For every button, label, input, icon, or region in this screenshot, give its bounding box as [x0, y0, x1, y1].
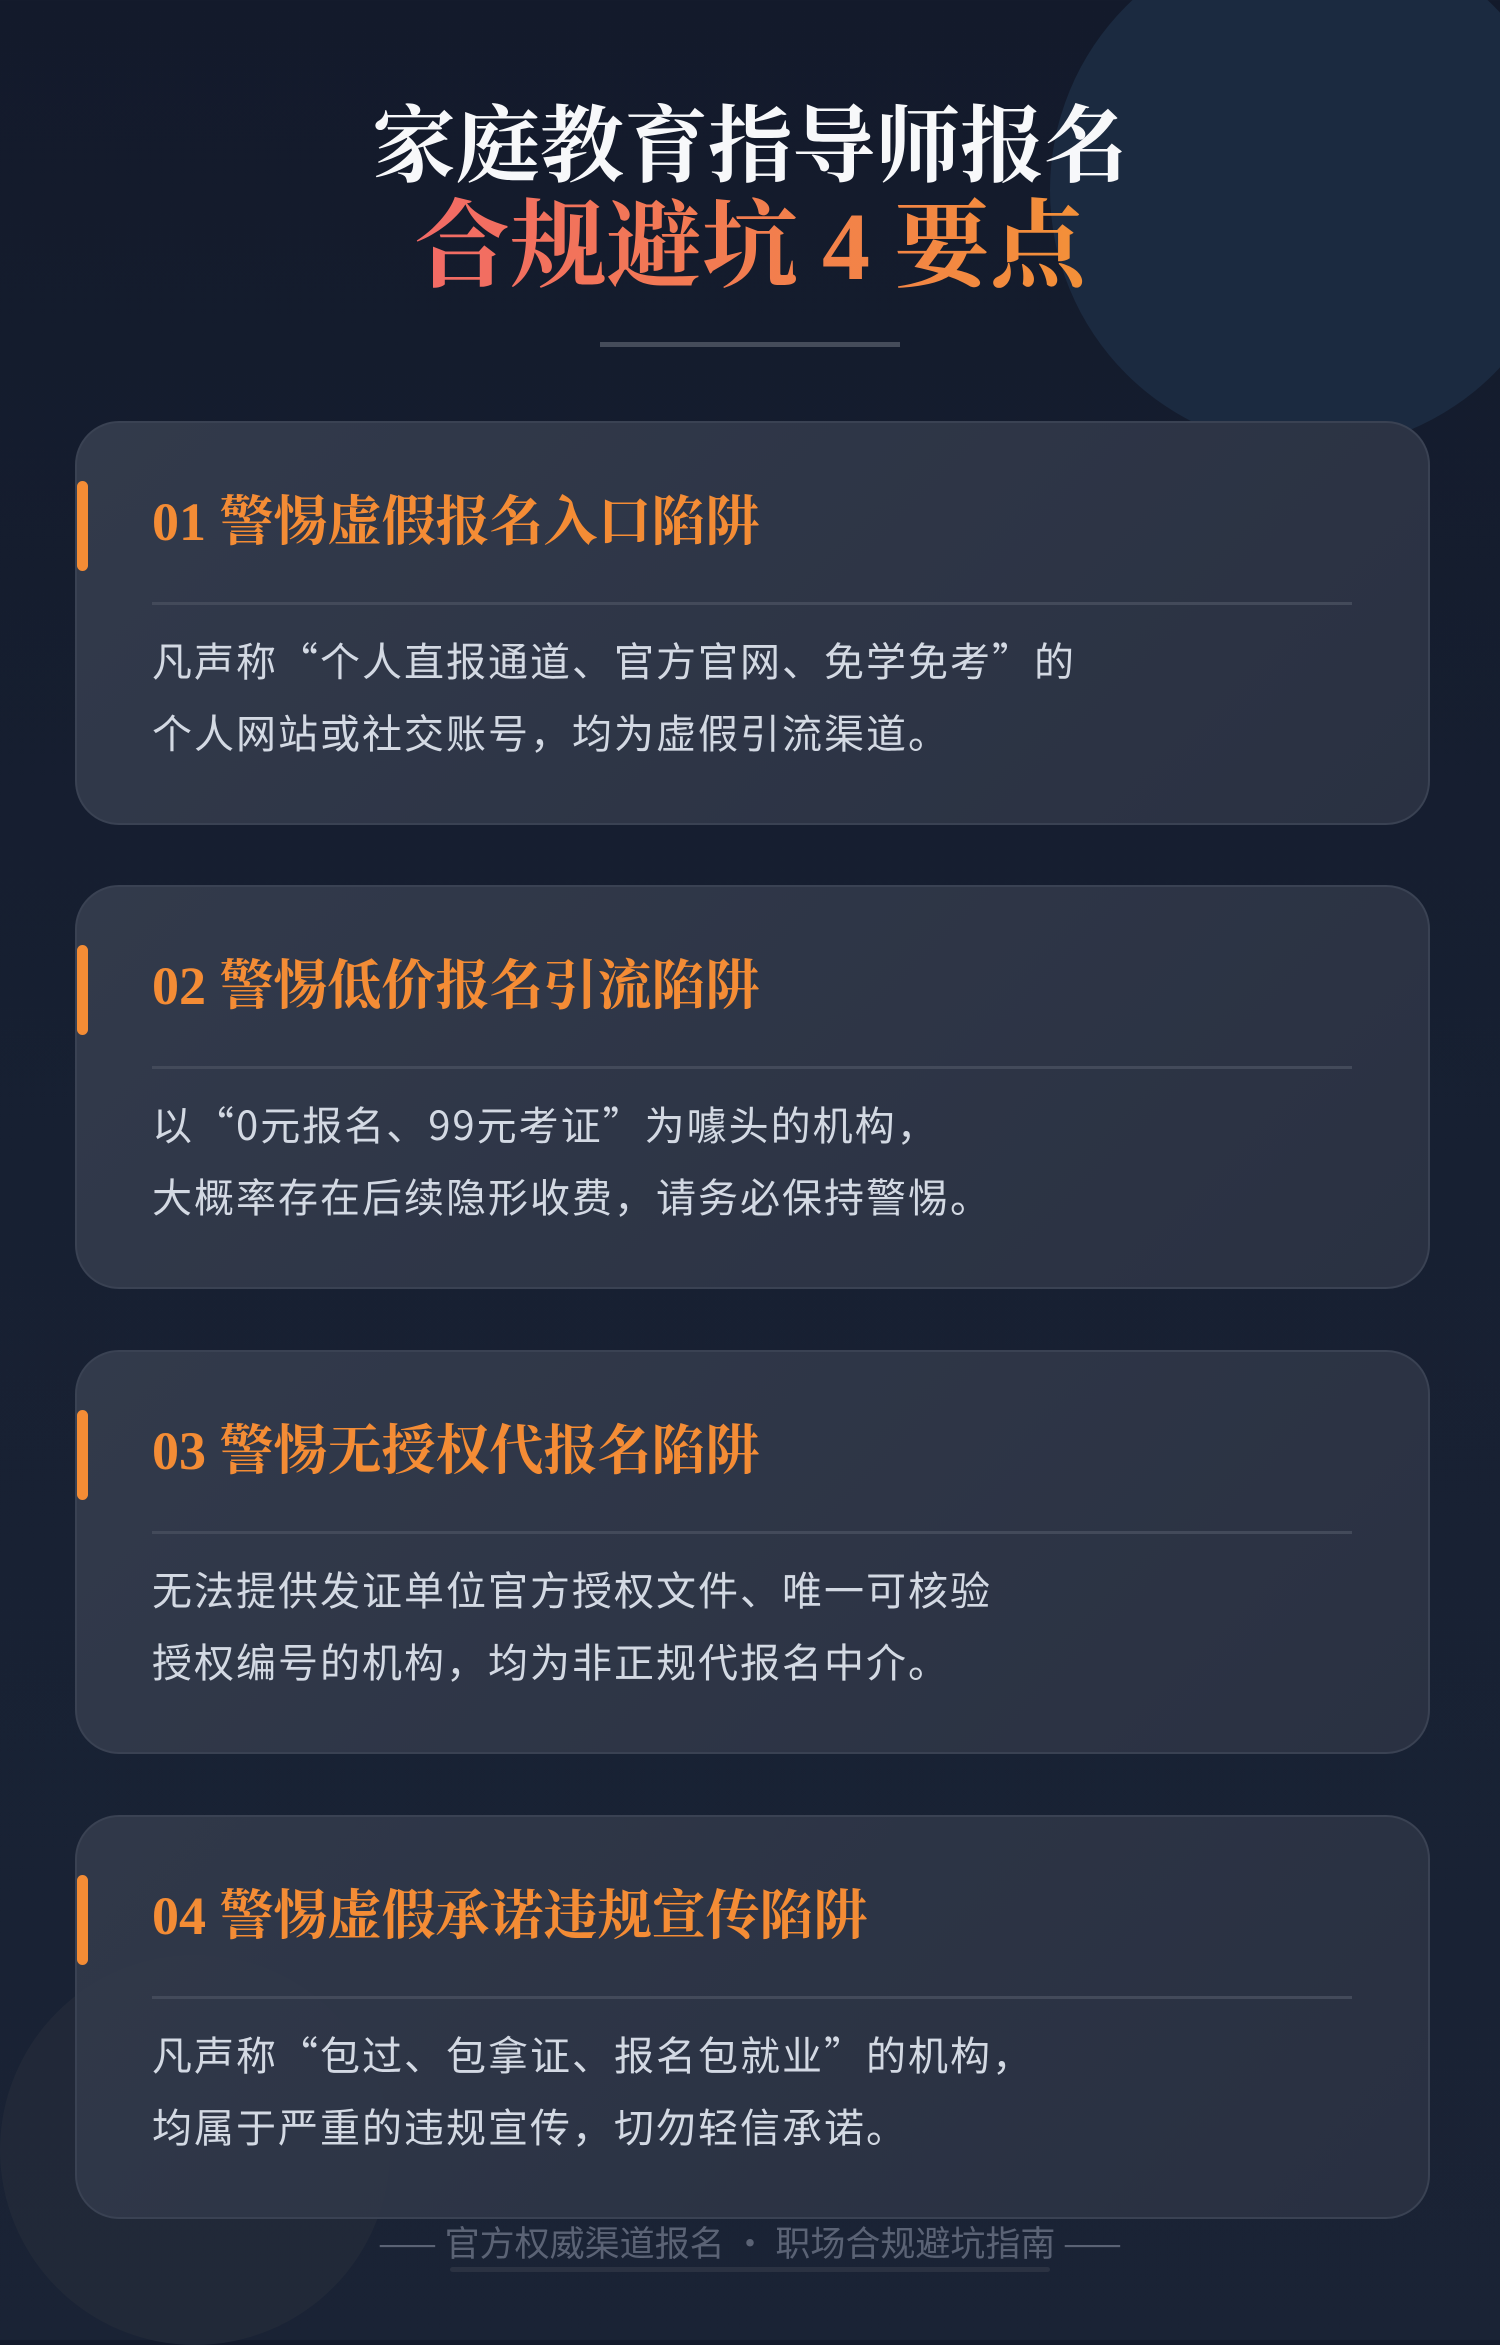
body 03: 无法提供发证单位官方授权文件、唯一可核验: [152, 1559, 992, 1617]
body 01: 个人网站或社交账号，均为虚假引流渠道。: [152, 702, 950, 760]
heading 01: 01 警惕虚假报名入口陷阱: [152, 492, 760, 552]
heading 02: 02 警惕低价报名引流陷阱: [152, 956, 760, 1016]
title line 1: 家庭教育指导师报名: [372, 101, 1128, 194]
body 02: [152, 1094, 992, 1224]
body 02: 大概率存在后续隐形收费，请务必保持警惕。: [152, 1166, 992, 1224]
footer bar: [450, 2267, 1050, 2272]
title line 2: 合规避坑 4 要点: [414, 193, 1086, 300]
panel: card 02: [75, 885, 1430, 1289]
panel: card 01: [75, 421, 1430, 825]
panel: card 04: [75, 1815, 1430, 2219]
footer text: —— 官方权威渠道报名 · 职场合规避坑指南 ——: [378, 2216, 1122, 2267]
heading 04: 04 警惕虚假承诺违规宣传陷阱: [152, 1886, 868, 1946]
heading 03: 03 警惕无授权代报名陷阱: [152, 1421, 760, 1481]
body 04: 均属于严重的违规宣传，切勿轻信承诺。: [152, 2096, 908, 2154]
body 04: 凡声称“包过、包拿证、报名包就业”的机构，: [152, 2024, 1034, 2082]
decorative circle: bottom left: [0, 1955, 390, 2345]
decorative circle: top right: [1050, 0, 1500, 450]
title divider: [600, 342, 900, 347]
body 04: [152, 2024, 1034, 2154]
body 01: [152, 630, 1076, 760]
panel: card 03: [75, 1350, 1430, 1754]
body 01: 凡声称“个人直报通道、官方官网、免学免考”的: [152, 630, 1076, 688]
body 02: 以“0元报名、99元考证”为噱头的机构，: [152, 1094, 939, 1152]
body 03: 授权编号的机构，均为非正规代报名中介。: [152, 1631, 950, 1689]
body 03: [152, 1559, 992, 1689]
